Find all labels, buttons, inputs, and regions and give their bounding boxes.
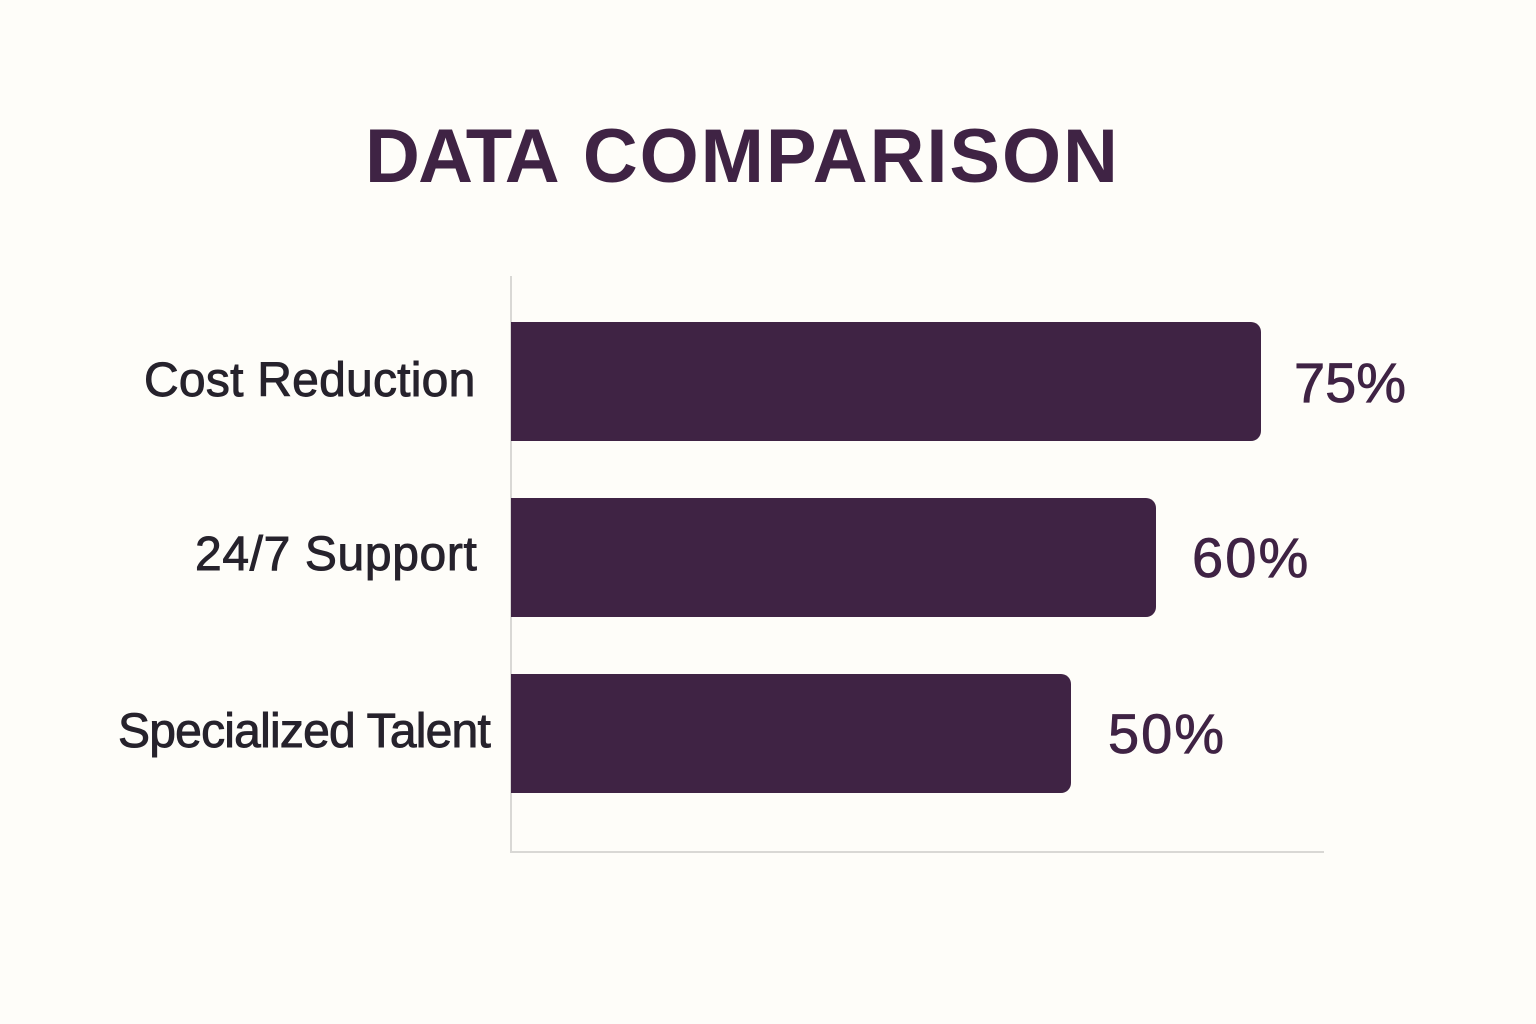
y axis	[510, 276, 512, 852]
value: 50%: 50%	[1108, 702, 1226, 765]
label: 24/7 Support: 24/7 Support	[195, 528, 477, 581]
x axis	[510, 851, 1324, 853]
label: Cost Reduction: Cost Reduction	[144, 354, 476, 407]
label: Specialized Talent: Specialized Talent	[118, 705, 490, 758]
title: DATA COMPARISON	[365, 114, 1120, 199]
value: 60%: 60%	[1192, 526, 1310, 589]
bar: 24/7 Support	[511, 498, 1156, 617]
bar: Cost Reduction	[511, 322, 1260, 441]
bar chart	[510, 276, 1324, 853]
value: 75%: 75%	[1294, 351, 1406, 414]
bar: Specialized Talent	[511, 674, 1071, 793]
